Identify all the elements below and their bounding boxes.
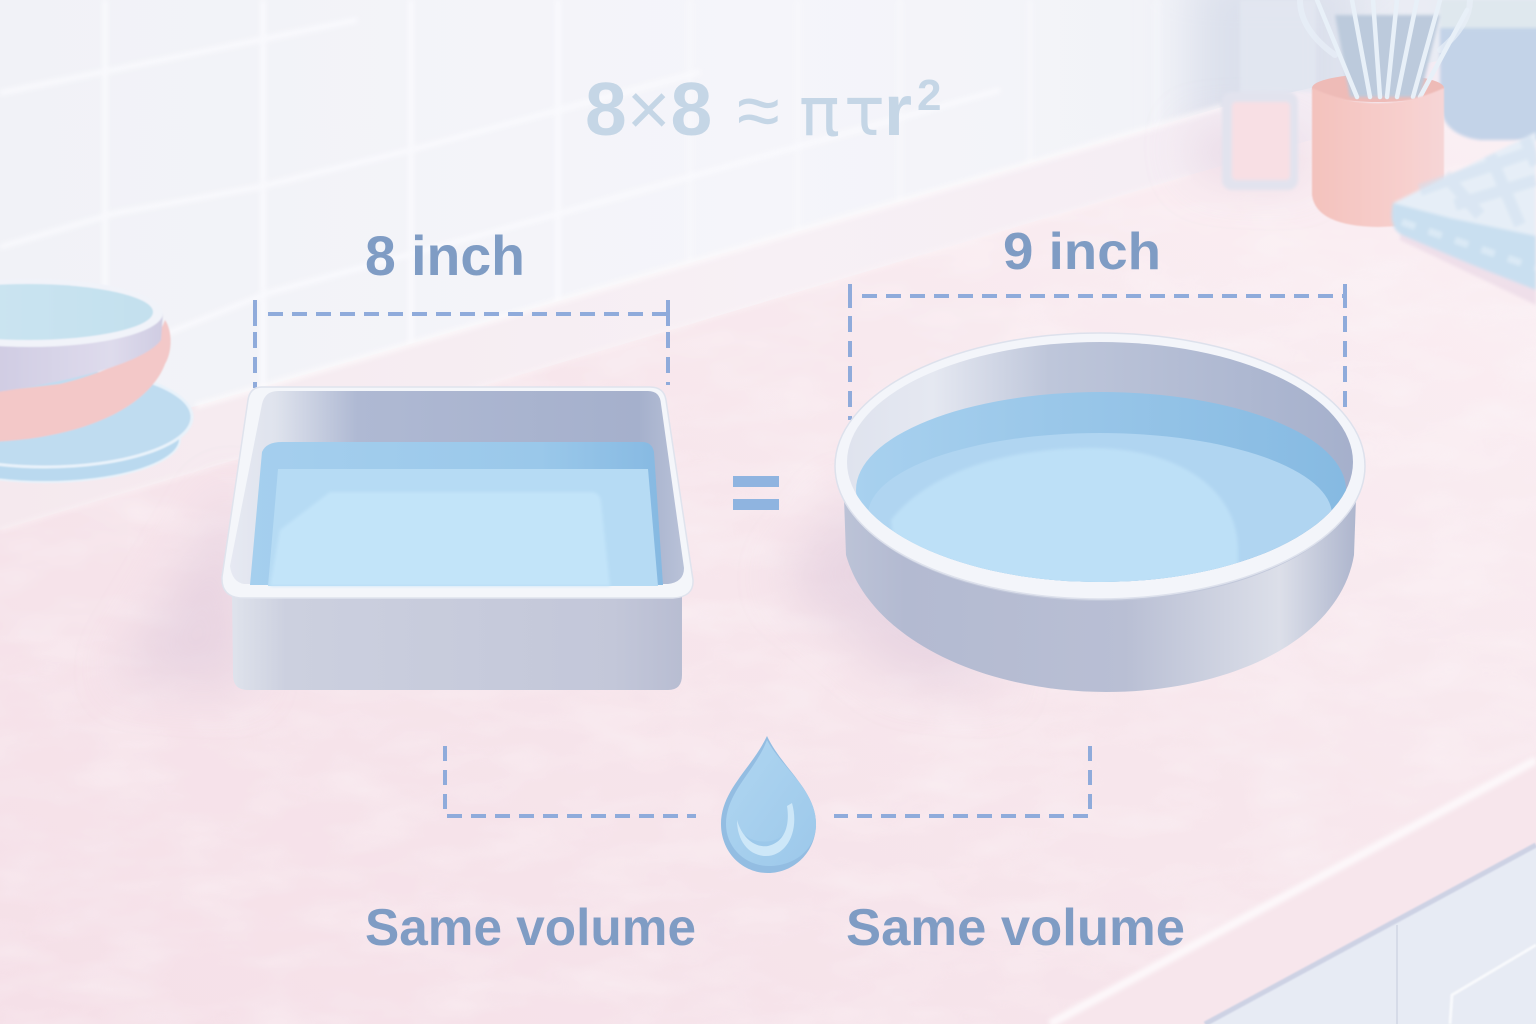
water bbox=[856, 392, 1346, 600]
round pan bbox=[835, 333, 1365, 692]
icon: pink bowl bbox=[0, 320, 171, 442]
label: same volume left: Same volume bbox=[365, 899, 696, 957]
water bbox=[250, 442, 663, 586]
icon: water drop bbox=[721, 736, 816, 873]
icon: checked towel bbox=[1392, 132, 1536, 305]
icon: glass jar bbox=[1222, 0, 1316, 190]
shadows under pans bbox=[115, 130, 1310, 690]
icon: whisk bbox=[1300, 0, 1470, 97]
formula: τ bbox=[844, 73, 885, 152]
formula: 2 bbox=[917, 71, 941, 120]
cabinet bbox=[1205, 845, 1536, 1024]
formula: 8×8 bbox=[585, 67, 712, 151]
dishes at left bbox=[0, 279, 192, 482]
dimension line: 9 inch bbox=[850, 284, 1345, 420]
pan rim bbox=[222, 387, 693, 598]
pan side bbox=[232, 590, 682, 690]
icon: pink crock bbox=[1312, 88, 1444, 227]
square pan bbox=[222, 387, 693, 690]
formula: r bbox=[884, 71, 912, 151]
pan interior wall bbox=[847, 342, 1353, 582]
icon: lilac bowl bbox=[0, 279, 163, 393]
pan interior wall bbox=[230, 391, 684, 584]
icon: plates bbox=[0, 367, 192, 482]
label: 8 inch: 8 inch bbox=[365, 224, 525, 287]
label: same volume right: Same volume bbox=[846, 899, 1185, 957]
pan rim bbox=[836, 335, 1364, 601]
pan side bbox=[843, 470, 1357, 692]
tiled wall background bbox=[0, 0, 1536, 560]
utensils at right bbox=[1222, 0, 1536, 305]
formula bbox=[585, 66, 941, 154]
equals sign bbox=[733, 476, 779, 510]
label: 9 inch: 9 inch bbox=[1003, 223, 1161, 281]
bracket: same volume bbox=[445, 746, 1090, 816]
formula: ≈ bbox=[737, 66, 780, 154]
icon: blue canister bbox=[1440, 0, 1536, 140]
icon: pink crock opening bbox=[1312, 74, 1444, 102]
dimension line: 8 inch bbox=[255, 300, 668, 388]
formula: π bbox=[799, 73, 840, 152]
